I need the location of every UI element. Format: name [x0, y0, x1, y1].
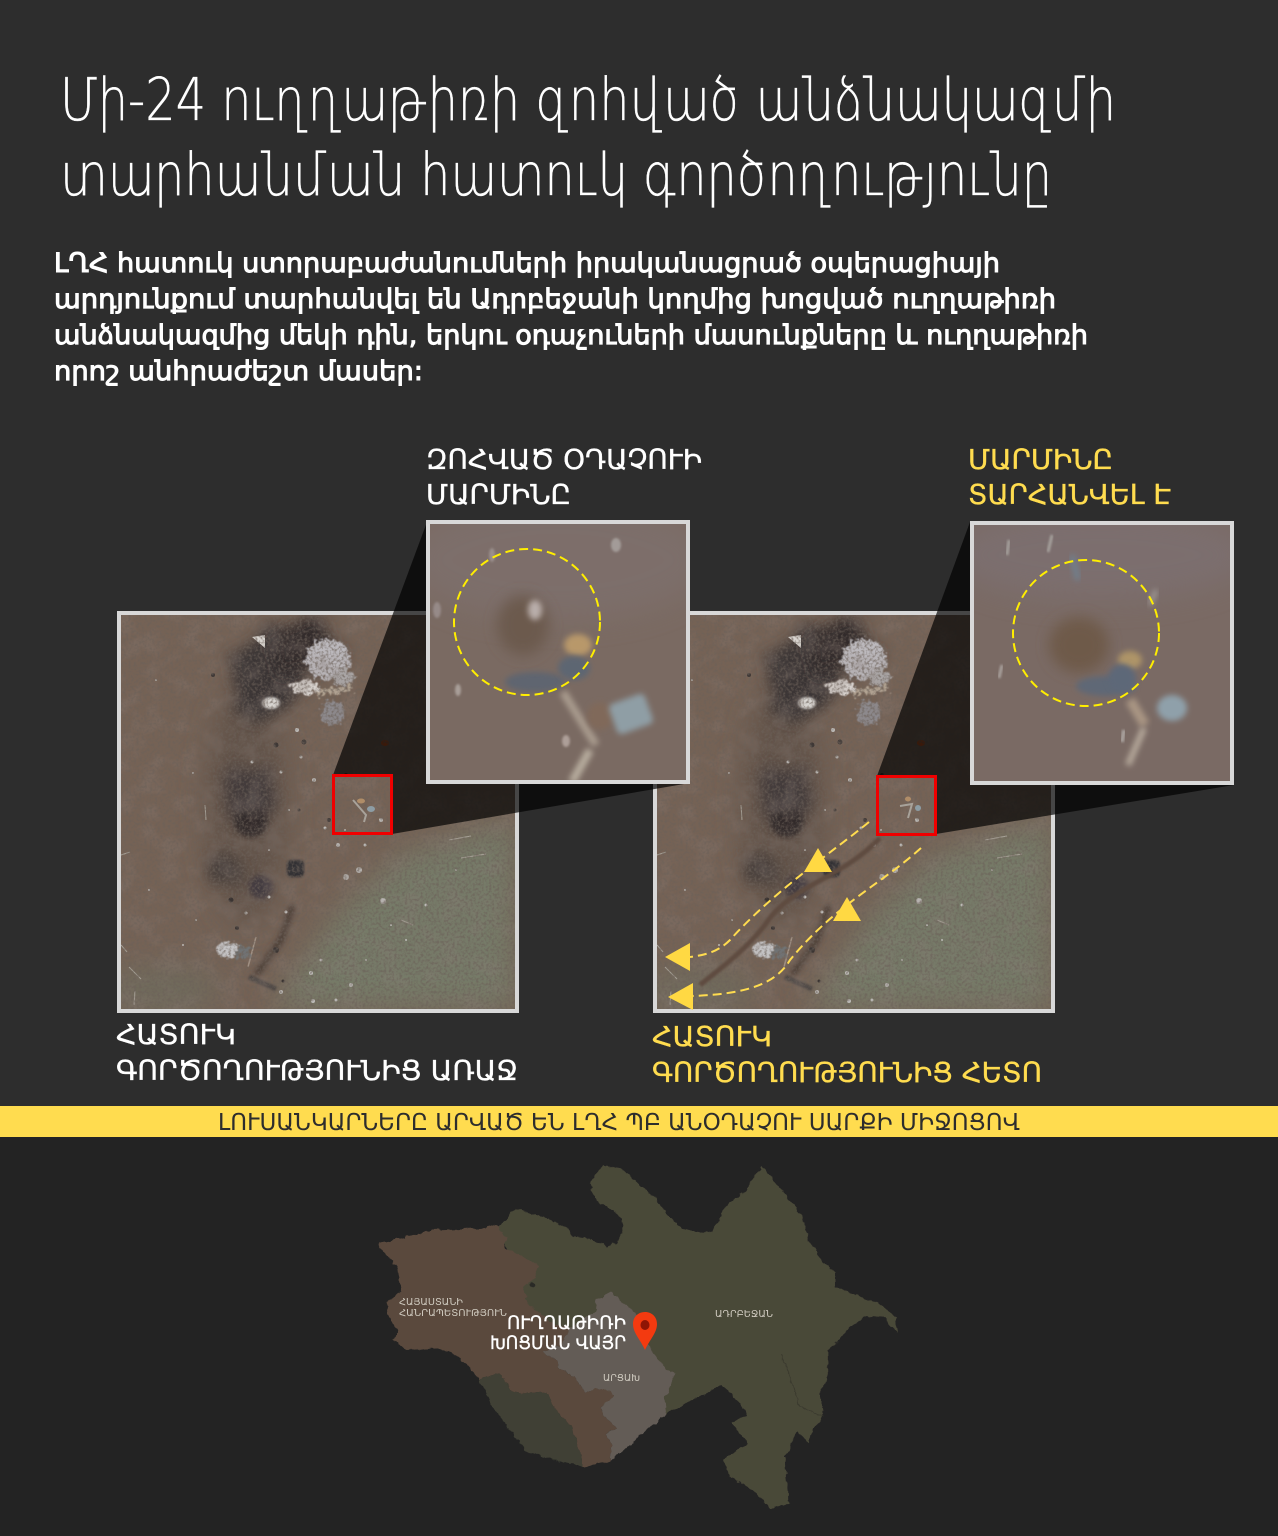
label: pilot body: ՄԱՐՄԻՆԸ [426, 478, 571, 511]
map label: crash site: ՈՒՂՂԱԹԻՌԻ [507, 1312, 626, 1334]
photo: before the operation [101, 613, 517, 1015]
caption: before operation [116, 1018, 518, 1087]
title [60, 65, 1116, 209]
region: Artsakh [542, 1292, 674, 1462]
caption: before operation: ԳՈՐԾՈՂՈՒԹՅՈՒՆԻՑ ԱՌԱՋ [116, 1054, 518, 1087]
label: pilot body [426, 443, 702, 511]
map label: Azerbaijan: ԱԴՐԲԵՋԱՆ [715, 1309, 773, 1320]
map label: Armenia [399, 1297, 507, 1319]
intro text block: անձնակազմից մեկի դին, երկու օդաչուների մասունքները և ուղղաթիռի [54, 320, 1088, 351]
lower dark background [0, 1137, 1278, 1536]
intro text block: որոշ անհրաժեշտ մասեր: [54, 356, 423, 387]
map label: Armenia: ՀԱՆՐԱՊԵՏՈՒԹՅՈՒՆ [399, 1308, 507, 1319]
map label: Armenia: ՀԱՅԱՍՏԱՆԻ [399, 1297, 463, 1308]
label: body evacuated [968, 443, 1171, 511]
label: body evacuated: ՄԱՐՄԻՆԸ [968, 443, 1113, 476]
zoom wedge: right [877, 522, 1234, 834]
intro text block: արդյունքում տարհանվել են Ադրբեջանի կողմից խոցված ուղղաթիռի [54, 284, 1056, 315]
label: body evacuated: ՏԱՐՀԱՆՎԵԼ Է [968, 478, 1171, 511]
lake [530, 1282, 534, 1288]
label: pilot body: ԶՈՀՎԱԾ ՕԴԱՉՈՒԻ [426, 443, 702, 476]
arrows: dragged body trails [665, 822, 921, 1010]
caption: after operation: ՀԱՏՈՒԿ [652, 1020, 772, 1053]
photo: after the operation [637, 613, 1053, 1015]
red marker: before [332, 774, 393, 835]
map label: crash site [490, 1312, 626, 1354]
zoom wedge: left [333, 522, 690, 834]
inset photo: body has been evacuated [970, 521, 1234, 785]
river [781, 1353, 824, 1417]
icon: red location pin [633, 1312, 657, 1350]
region: Nakhichevan-side lowland [480, 1373, 583, 1467]
caption: after operation [652, 1020, 1042, 1089]
caption: after operation: ԳՈՐԾՈՂՈՒԹՅՈՒՆԻՑ ՀԵՏՈ [652, 1056, 1042, 1089]
inset photo: body of killed pilot [426, 520, 690, 784]
map label: crash site: ԽՈՑՄԱՆ ՎԱՅՐ [490, 1332, 626, 1354]
title: տարհանման հատուկ գործողությունը [60, 140, 1052, 209]
caption: before operation: ՀԱՏՈՒԿ [116, 1018, 236, 1051]
dashed circle [1013, 560, 1159, 706]
intro text block: ԼՂՀ հատուկ ստորաբաժանումների իրականացրած օպերացիայի [54, 248, 1000, 279]
yellow banner: ԼՈՒՍԱՆԿԱՐՆԵՐԸ ԱՐՎԱԾ ԵՆ ԼՂՀ ՊԲ ԱՆՕԴԱՉՈՒ ՍԱՐՔԻ ՄԻՋՈՑՈՎ [218, 1110, 1020, 1136]
yellow banner [0, 1106, 1278, 1137]
intro text block [54, 248, 1088, 387]
red marker: after [876, 775, 937, 836]
region: Azerbaijan [497, 1165, 897, 1508]
map label: Artsakh: ԱՐՑԱԽ [603, 1373, 640, 1384]
map [380, 1165, 897, 1508]
dashed circle [454, 549, 600, 695]
region: Armenia [380, 1225, 617, 1467]
